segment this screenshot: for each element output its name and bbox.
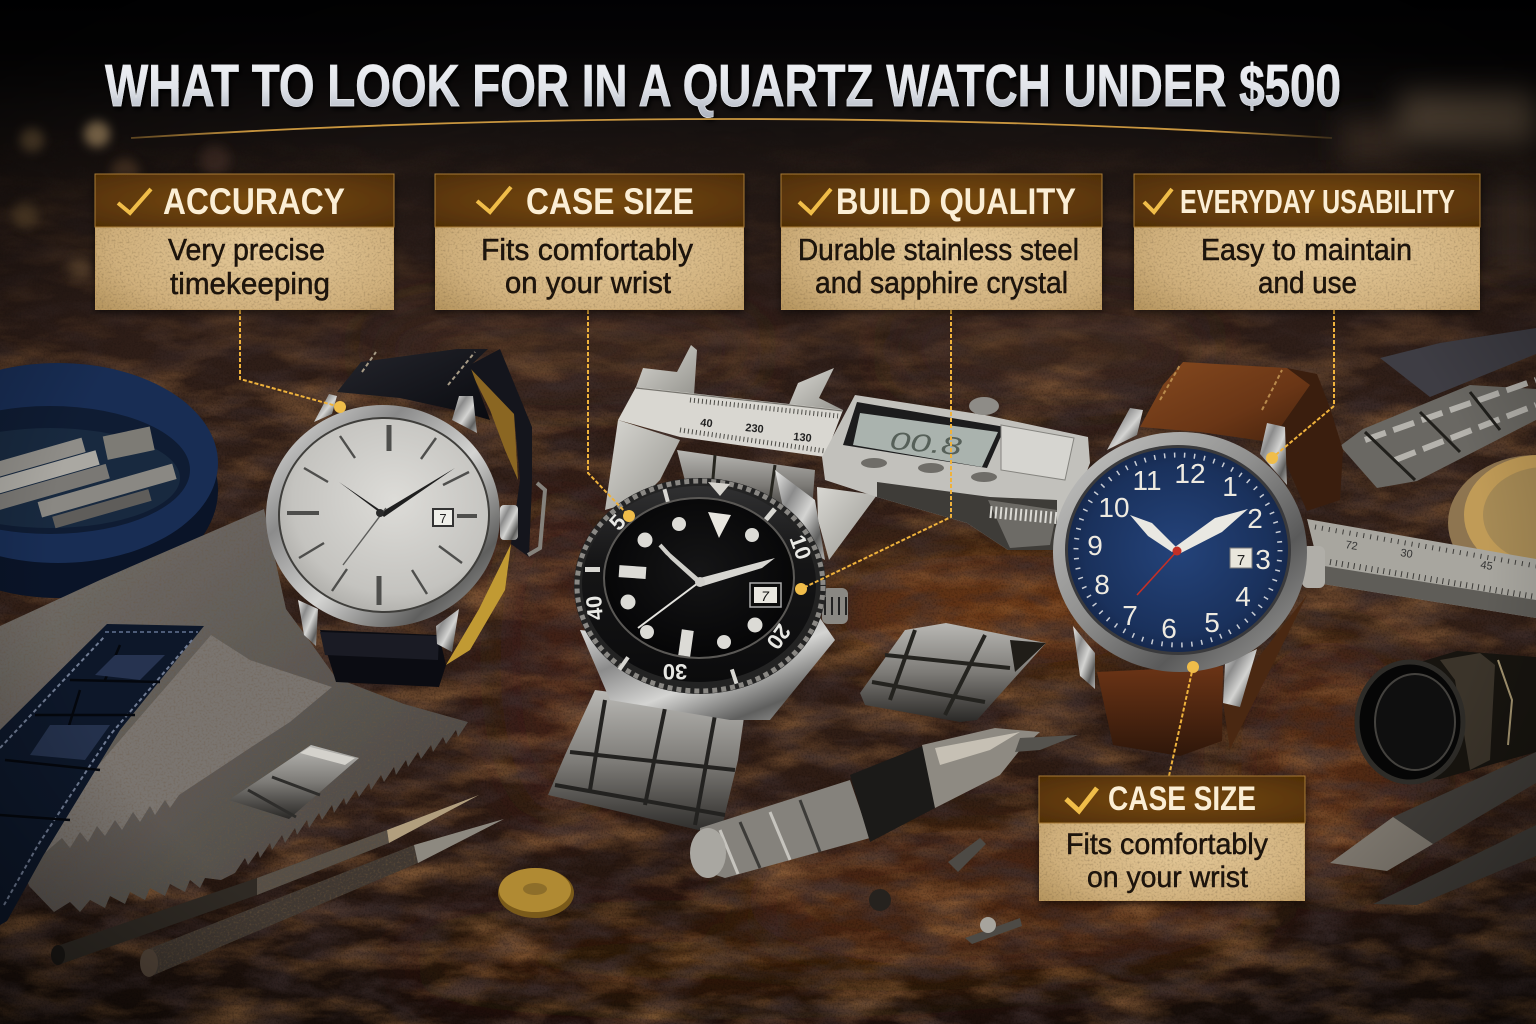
connector: build quality bbox=[795, 310, 951, 595]
watch 3: blue dial on brown strap: 1 bbox=[1222, 471, 1238, 502]
watch 3: blue dial on brown strap: 2 bbox=[1247, 503, 1263, 534]
watch 2: black dive watch with bracelet: 20 bbox=[761, 620, 796, 654]
text: case size description: Fits comfortably bbox=[481, 232, 693, 267]
panel: everyday usability bbox=[1134, 174, 1480, 310]
text: build quality description: Durable stainless steel bbox=[798, 232, 1079, 267]
caliper bbox=[605, 345, 1090, 560]
spare bracelet links bbox=[860, 623, 1046, 722]
watch 2: black dive watch with bracelet bbox=[548, 450, 848, 835]
panel: lower case size bbox=[1039, 776, 1305, 901]
right ruler: 45 bbox=[1480, 559, 1494, 573]
text: lower case size description: Fits comfortably bbox=[1066, 828, 1268, 861]
heading: everyday usability: EVERYDAY USABILITY bbox=[1180, 183, 1455, 220]
text: lower case size description: on your wrist bbox=[1087, 861, 1249, 894]
watch 2: black dive watch with bracelet: 30 bbox=[663, 659, 687, 684]
connector: case size bbox=[588, 310, 635, 522]
screwdriver bbox=[690, 728, 1078, 878]
coin bbox=[498, 868, 574, 918]
connector: everyday usability bbox=[1266, 310, 1334, 464]
icon: check bbox=[1144, 189, 1172, 212]
watch 2: black dive watch with bracelet: 5 bbox=[604, 509, 631, 535]
watch 1: white dial on black strap bbox=[266, 349, 545, 687]
watch 3: blue dial on brown strap: 11 bbox=[1132, 465, 1162, 496]
watch 3: blue dial on brown strap: 8 bbox=[1094, 569, 1110, 600]
watch 3: blue dial on brown strap: 10 bbox=[1098, 492, 1130, 523]
text: build quality description: and sapphire crystal bbox=[815, 265, 1068, 300]
gold movement bbox=[1448, 455, 1536, 591]
icon: check bbox=[799, 189, 831, 213]
bracelet link on cloth bbox=[229, 745, 359, 819]
connector: accuracy bbox=[240, 310, 346, 413]
connector: lower case size bbox=[1169, 661, 1199, 776]
watch 2: black dive watch with bracelet: 7 bbox=[761, 588, 770, 604]
text: accuracy description: Very precise bbox=[168, 232, 325, 267]
watch 3: blue dial on brown strap: 7 bbox=[1237, 552, 1245, 569]
watch 3: blue dial on brown strap bbox=[1053, 362, 1343, 756]
icon: check bbox=[118, 189, 151, 213]
panel: accuracy bbox=[95, 174, 394, 310]
heading: case size: CASE SIZE bbox=[526, 181, 694, 222]
heading: build quality: BUILD QUALITY bbox=[836, 181, 1076, 222]
watch 3: blue dial on brown strap: 4 bbox=[1235, 581, 1251, 612]
right ruler: 30 bbox=[1400, 547, 1414, 561]
icon: check bbox=[1066, 788, 1097, 811]
heading: accuracy: ACCURACY bbox=[163, 181, 345, 222]
right ruler bbox=[1307, 519, 1536, 618]
watch 2: black dive watch with bracelet: 10 bbox=[785, 531, 816, 563]
leather strap accessory bbox=[0, 624, 204, 925]
polishing cloth bbox=[0, 509, 468, 912]
watch 3: blue dial on brown strap: 3 bbox=[1255, 544, 1271, 575]
icon: check bbox=[477, 187, 511, 212]
caliper: 230 bbox=[745, 422, 764, 436]
title underline bbox=[131, 119, 1332, 138]
watch 1: white dial on black strap: 7 bbox=[439, 511, 447, 526]
tweezers and tool handles bbox=[51, 795, 504, 977]
watch 3: blue dial on brown strap: 6 bbox=[1161, 613, 1177, 644]
heading: lower case size: CASE SIZE bbox=[1108, 780, 1256, 818]
caliper: 130 bbox=[793, 431, 812, 445]
text: everyday usability description: Easy to maintain bbox=[1201, 232, 1412, 267]
panel: build quality bbox=[781, 174, 1102, 310]
watch 3: blue dial on brown strap: 12 bbox=[1174, 458, 1206, 489]
spare bracelet top right bbox=[1340, 328, 1536, 488]
hand tools lower right bbox=[1330, 752, 1536, 905]
watch 3: blue dial on brown strap: 5 bbox=[1204, 607, 1220, 638]
text: case size description: on your wrist bbox=[505, 265, 671, 300]
watch 3: blue dial on brown strap: 9 bbox=[1087, 530, 1103, 561]
caliper: 00.8 bbox=[889, 427, 963, 461]
small screws bbox=[869, 838, 1022, 944]
watch 2: black dive watch with bracelet: 40 bbox=[581, 595, 608, 621]
watch 3: blue dial on brown strap: 7 bbox=[1122, 600, 1138, 631]
text: accuracy description: timekeeping bbox=[170, 266, 330, 301]
text: everyday usability description: and use bbox=[1258, 265, 1357, 300]
right ruler: 72 bbox=[1345, 539, 1359, 553]
caliper: 40 bbox=[700, 417, 713, 430]
panel: case size bbox=[435, 174, 744, 310]
parts tray bbox=[0, 363, 218, 598]
loupe bbox=[1357, 651, 1536, 782]
